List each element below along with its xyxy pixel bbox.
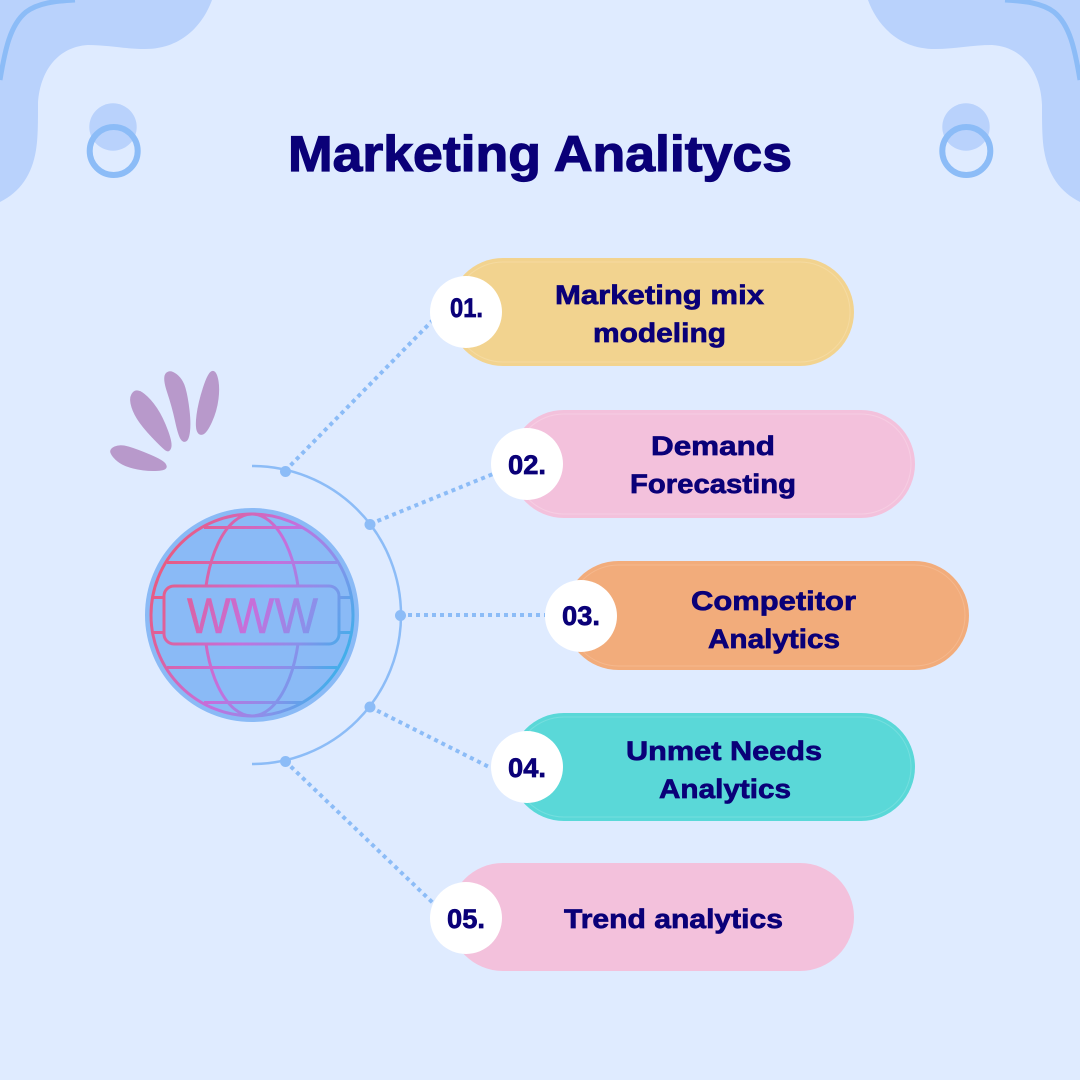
number 2: 02. [508, 450, 546, 480]
number 4: 04. [508, 753, 546, 783]
item 3: competitor analytics [545, 561, 969, 670]
item 5: trend analytics [430, 863, 854, 971]
number badge 2 [491, 428, 563, 500]
dotted connectors [285, 320, 545, 903]
number 1: 01. [450, 293, 483, 323]
pill 1 [449, 258, 854, 366]
connector arc [252, 466, 401, 764]
right circles decoration [942, 103, 990, 175]
label 3 second line: Analytics [708, 624, 840, 654]
pill 2 [510, 410, 915, 518]
pill 3 [564, 561, 969, 670]
label 3: Competitor [691, 586, 857, 616]
number 5: 05. [447, 904, 485, 934]
number badge 5 [430, 882, 502, 954]
label 5: Trend analytics [564, 904, 783, 934]
number badge 4 [491, 731, 563, 803]
number badge 3 [545, 580, 617, 652]
item 4: unmet needs analytics [491, 713, 915, 821]
number badge 1 [430, 276, 502, 348]
left circles decoration [89, 103, 138, 175]
label 2 second line: Forecasting [630, 469, 796, 499]
icon: purple petals [110, 371, 219, 471]
label 4: Unmet Needs [626, 736, 822, 766]
title: Marketing Analitycs [288, 126, 792, 182]
label 1 second line: modeling [593, 318, 726, 348]
label 4 second line: Analytics [659, 774, 791, 804]
pill 5 [449, 863, 854, 971]
number 3: 03. [562, 601, 600, 631]
icon: www globe: WWW [187, 588, 319, 644]
pill 1 inner outline [453, 262, 850, 362]
icon: www globe [145, 508, 359, 722]
label 1: Marketing mix [555, 280, 764, 310]
top left corner blob [0, 0, 212, 202]
item 1: marketing mix modeling [430, 258, 854, 366]
pill 4 inner outline [514, 717, 911, 817]
connector nodes [280, 466, 406, 767]
item 2: demand forecasting [491, 410, 915, 518]
label 2: Demand [651, 431, 775, 461]
pill 4 [510, 713, 915, 821]
top right corner blob [868, 0, 1080, 202]
pill 2 inner outline [514, 414, 911, 514]
pill 3 inner outline [568, 565, 965, 666]
